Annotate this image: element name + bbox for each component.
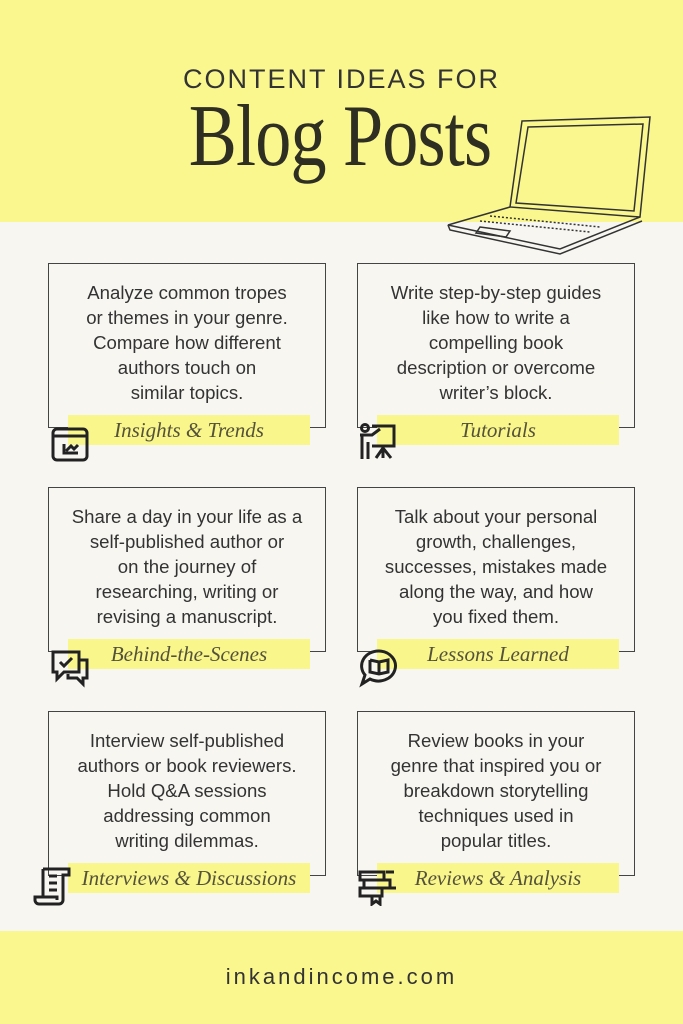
subtitle: CONTENT IDEAS FOR	[183, 64, 500, 94]
label: reviews	[377, 863, 619, 893]
panel: insights: or themes in your genre.	[86, 307, 288, 328]
panel: tutorials: compelling book	[429, 332, 563, 353]
panel: insights	[48, 263, 326, 428]
icon: book chat	[359, 650, 398, 688]
panel: interviews: authors or book reviewers.	[77, 755, 297, 776]
panel: reviews: genre that inspired you or	[391, 755, 601, 776]
panel: reviews	[357, 711, 635, 876]
footer band	[0, 931, 683, 1024]
label: insights: Insights & Trends	[114, 418, 264, 442]
panel: interviews: Hold Q&A sessions	[107, 780, 267, 801]
panel: lessons: Talk about your personal	[395, 506, 597, 527]
panel: tutorials: writer’s block.	[440, 382, 552, 403]
icon: laptop	[447, 116, 651, 255]
header band	[0, 0, 683, 222]
title: Blog Posts	[189, 88, 491, 185]
icon: scroll	[34, 868, 70, 906]
footer url: inkandincome.com	[226, 964, 457, 989]
panel: lessons: you fixed them.	[433, 606, 559, 627]
label: reviews: Reviews & Analysis	[415, 866, 581, 890]
panel: reviews: techniques used in	[418, 805, 574, 826]
icon: chart window	[52, 428, 88, 462]
label: lessons	[377, 639, 619, 669]
panel: behind the scenes: self-published author or	[90, 531, 284, 552]
panel: reviews: Review books in your	[408, 730, 584, 751]
icon: chat check	[52, 650, 88, 688]
label: tutorials	[377, 415, 619, 445]
panel: insights: similar topics.	[131, 382, 243, 403]
panel: behind the scenes: researching, writing or	[96, 581, 278, 602]
panel: reviews: breakdown storytelling	[403, 780, 588, 801]
label: insights	[68, 415, 310, 445]
icon: books	[358, 870, 396, 906]
panel: insights: Analyze common tropes	[87, 282, 287, 303]
label: tutorials: Tutorials	[460, 418, 536, 442]
panel: tutorials	[357, 263, 635, 428]
panel: interviews	[48, 711, 326, 876]
label: lessons: Lessons Learned	[427, 642, 569, 666]
panel: insights: Compare how different	[93, 332, 281, 353]
label: interviews: Interviews & Discussions	[82, 866, 296, 890]
panel: tutorials: Write step-by-step guides	[391, 282, 601, 303]
panel: interviews: Interview self-published	[90, 730, 284, 751]
panel: insights: authors touch on	[118, 357, 256, 378]
panel: lessons: along the way, and how	[399, 581, 593, 602]
label: behind the scenes	[68, 639, 310, 669]
panel: interviews: writing dilemmas.	[115, 830, 259, 851]
panel: lessons: successes, mistakes made	[385, 556, 607, 577]
panel: lessons: growth, challenges,	[416, 531, 576, 552]
label: behind the scenes: Behind-the-Scenes	[111, 642, 267, 666]
panel: tutorials: like how to write a	[422, 307, 570, 328]
panel: reviews: popular titles.	[441, 830, 551, 851]
panel: behind the scenes: revising a manuscript.	[97, 606, 277, 627]
panel: interviews: addressing common	[103, 805, 271, 826]
panel: behind the scenes: Share a day in your life as a	[72, 506, 302, 527]
panel: behind the scenes	[48, 487, 326, 652]
panel: tutorials: description or overcome	[397, 357, 595, 378]
panel: lessons	[357, 487, 635, 652]
panel: behind the scenes: on the journey of	[118, 556, 256, 577]
icon: presenter	[360, 423, 396, 459]
